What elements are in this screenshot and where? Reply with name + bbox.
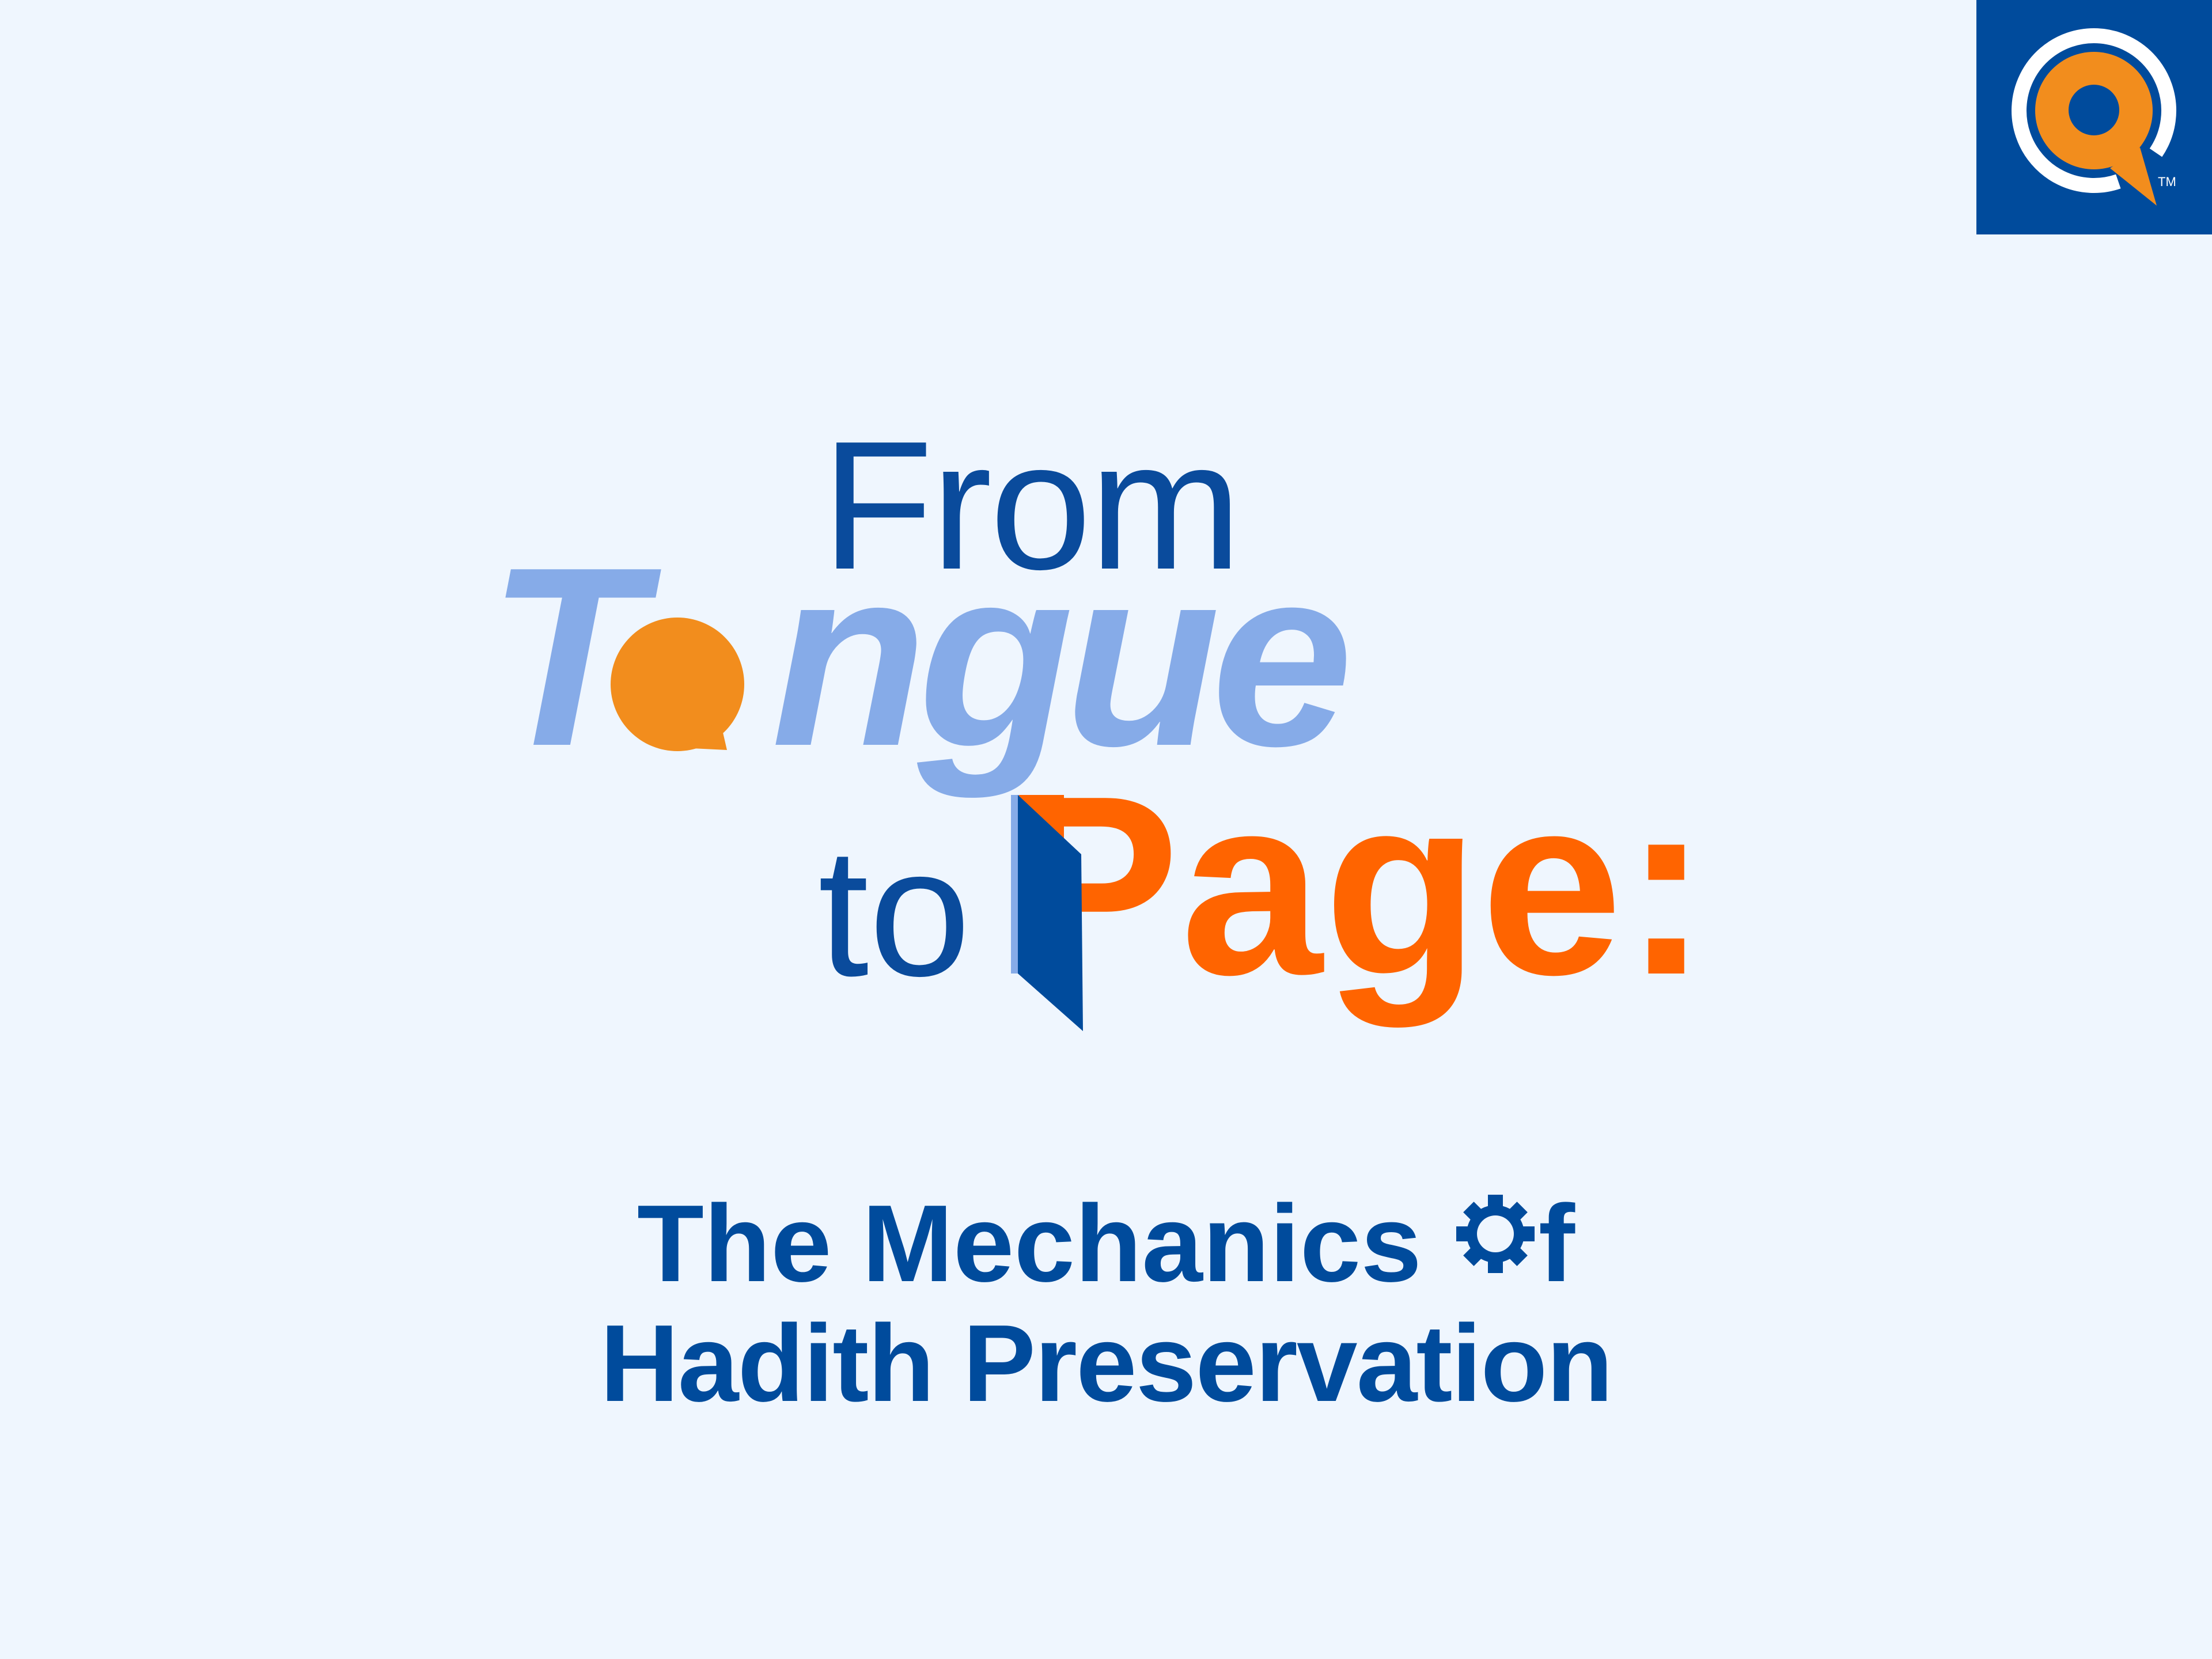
subtitle [600, 1183, 1612, 1425]
icon: open door [1011, 795, 1083, 1031]
icon: speech Q [1999, 16, 2189, 206]
logo [1976, 0, 2212, 234]
subtitle: Hadith Preservation [600, 1302, 1612, 1425]
icon: orange speech bubble [611, 618, 744, 751]
icon: speech Q: TM [2158, 175, 2176, 189]
title: Tongue: Tongue [487, 514, 1344, 799]
subtitle: The Mechanics f [637, 1183, 1575, 1305]
title: to: to [818, 810, 971, 1014]
title: From: From [821, 403, 1240, 608]
title: Page: Page: [1009, 743, 1710, 1028]
